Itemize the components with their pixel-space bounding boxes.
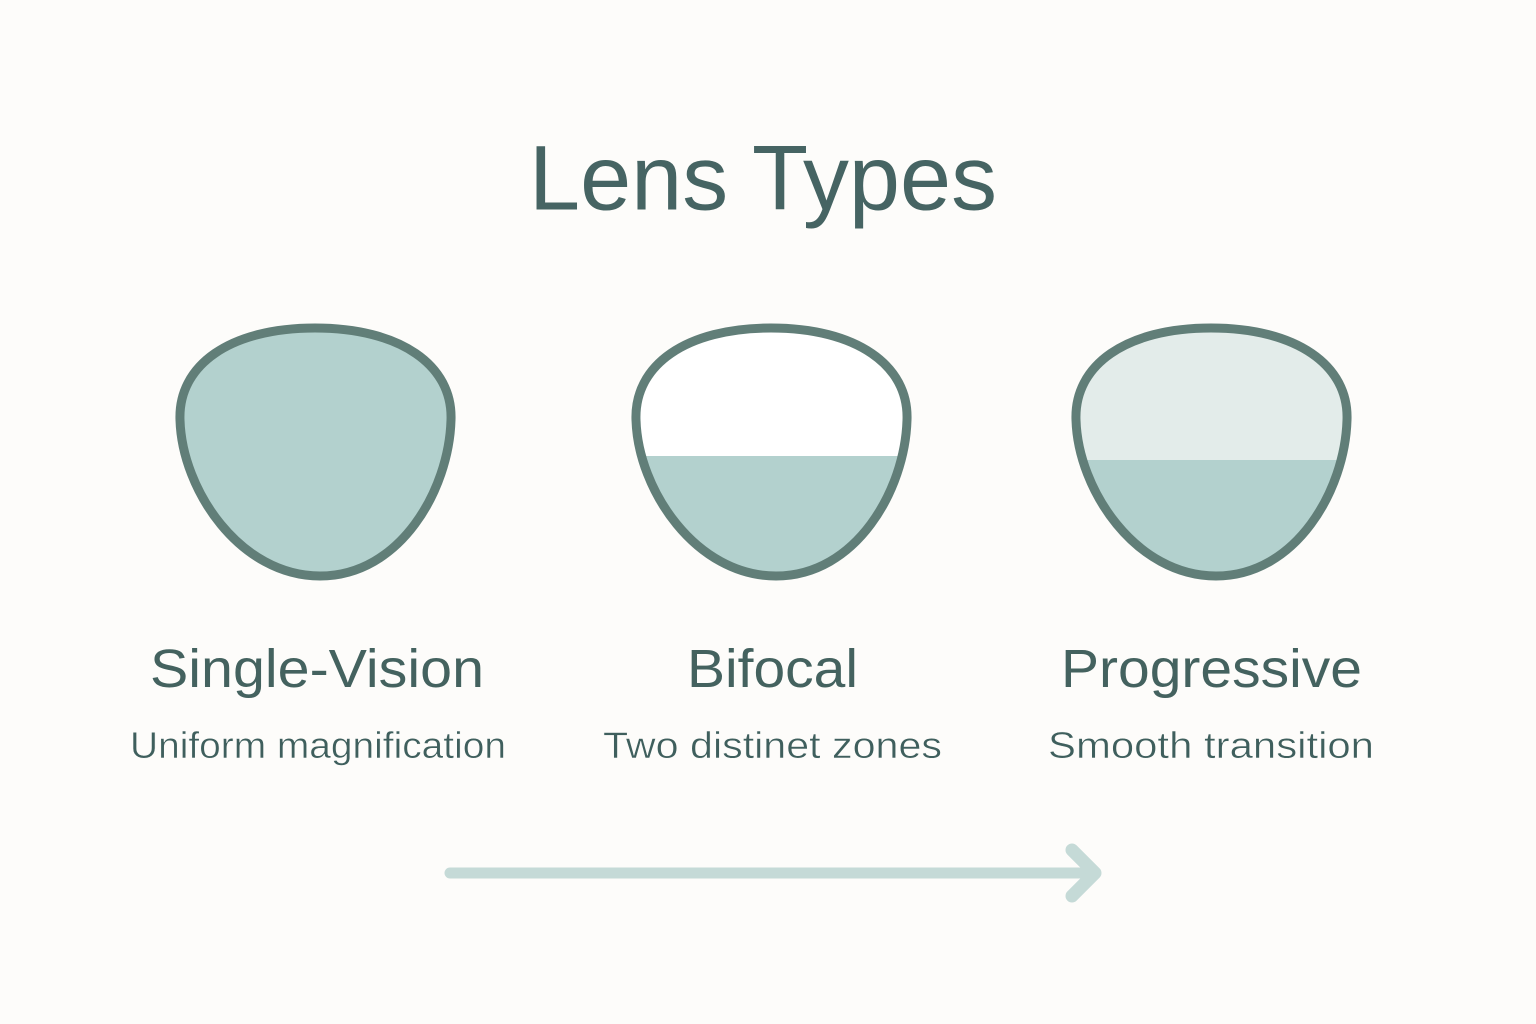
label: single-vision: Single-Vision [150,639,484,699]
label: bifocal: Bifocal [687,639,858,699]
description: progressive: Smooth transition [1048,725,1374,766]
arrow [450,850,1095,896]
progressive lower zone [1088,460,1336,572]
label: progressive: Progressive [1061,639,1362,699]
lens: bifocal [631,324,912,580]
lens: progressive [1071,324,1352,580]
description: bifocal: Two distinet zones [603,725,942,766]
description: single-vision: Uniform magnification [130,725,506,766]
lens: single-vision [180,328,451,576]
title: Lens Types [529,128,997,230]
bifocal lower zone [646,456,898,572]
